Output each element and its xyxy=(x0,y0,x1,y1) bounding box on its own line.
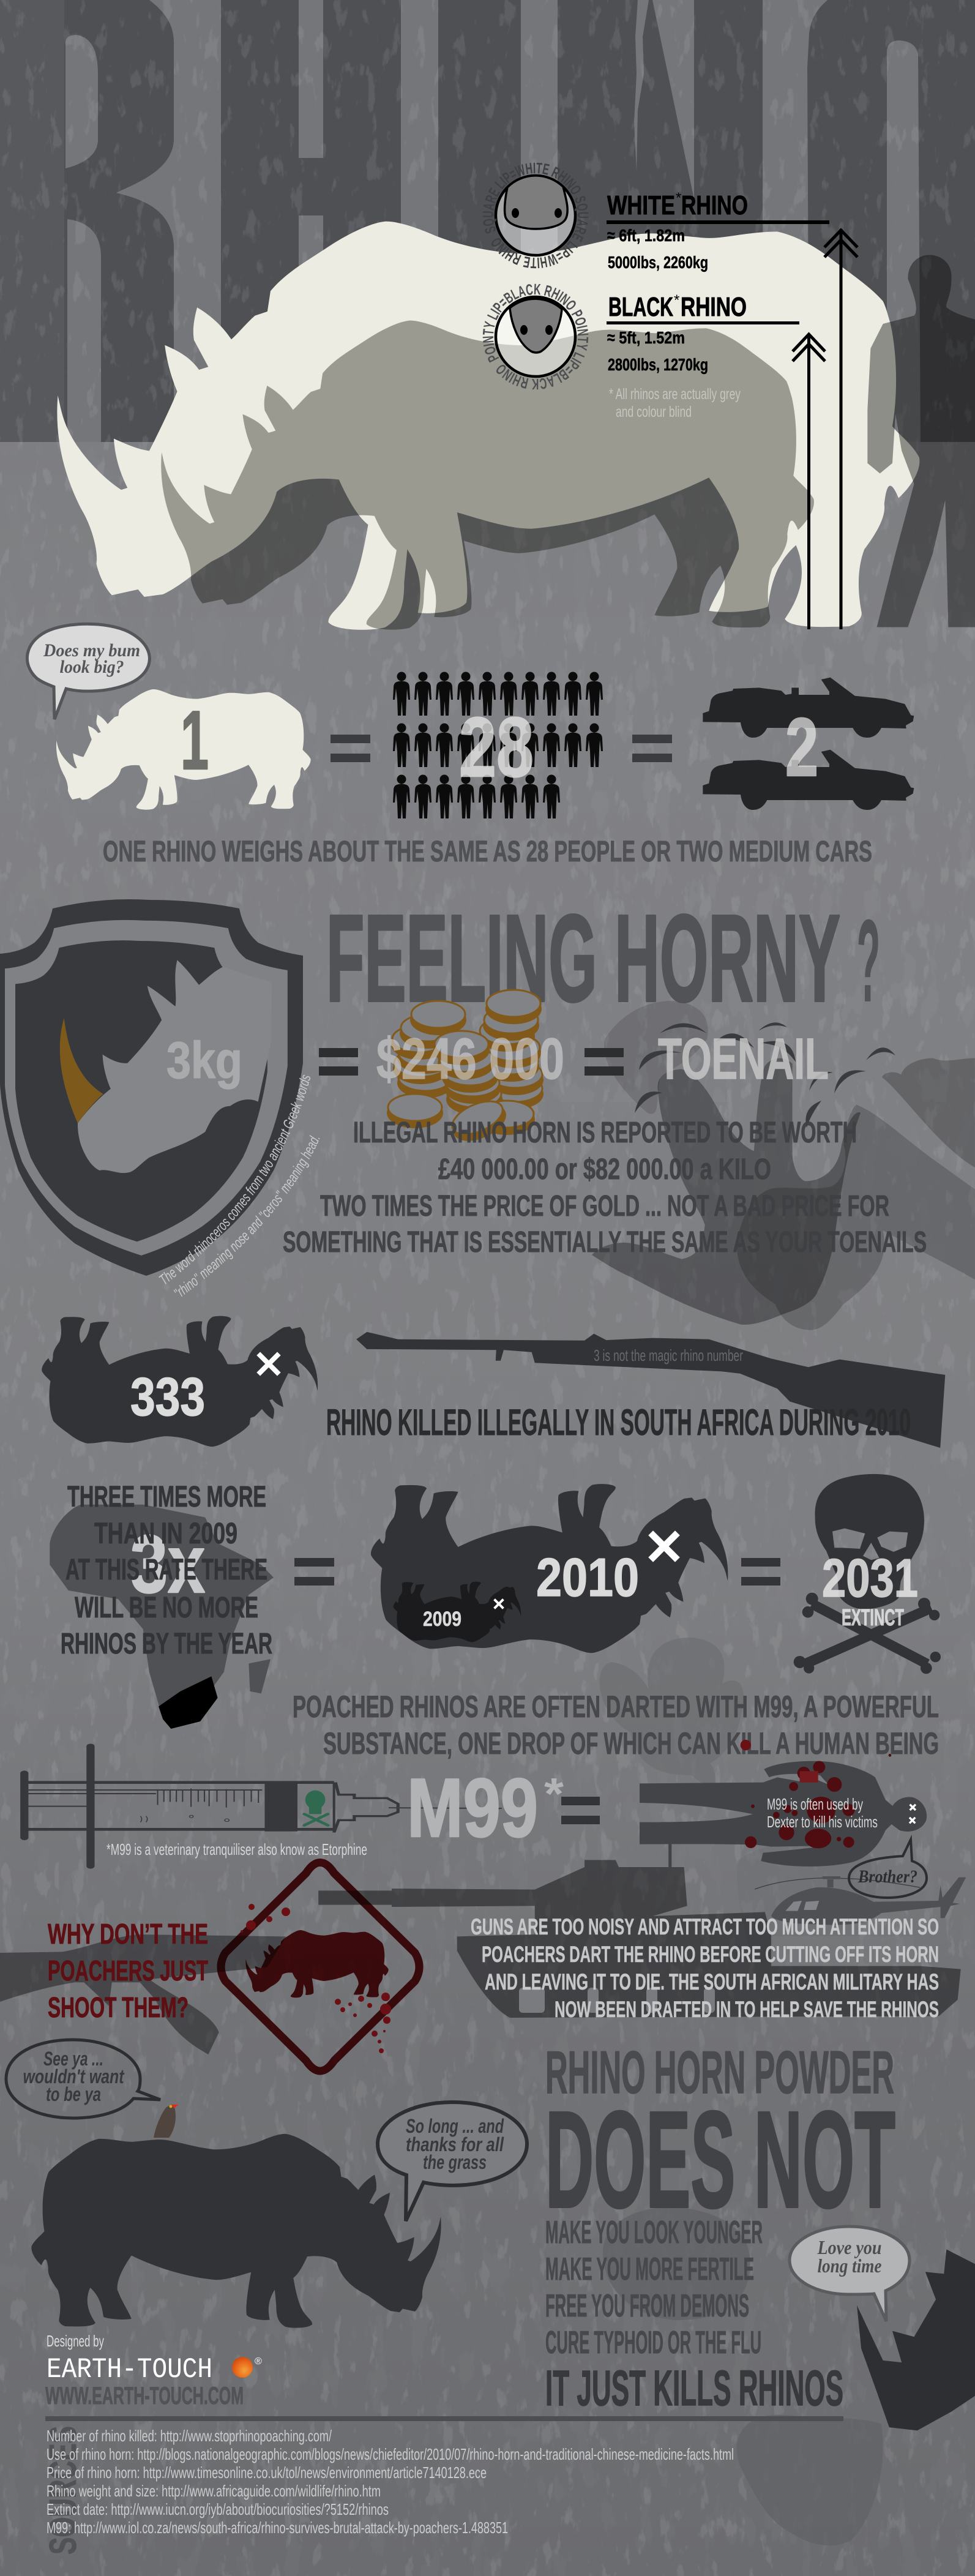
divider rule xyxy=(45,2416,843,2421)
arrow: white rhino height xyxy=(824,229,857,629)
dead rhino: 333 xyxy=(42,1316,318,1447)
black rhino stats xyxy=(607,292,799,374)
white rhino stats: 5000lbs, 2260kg xyxy=(608,253,708,272)
speech bubble: so long xyxy=(378,2102,527,2221)
number: 28: 28 xyxy=(459,700,534,795)
blood droplets xyxy=(241,1904,391,2053)
equals sign xyxy=(561,1797,600,1824)
white rhino stats: * xyxy=(676,190,681,206)
number: 3x: 3x xyxy=(130,1519,205,1610)
lip circle: white rhino: SQUARE LIP=WHITE RHINO SQUARE LIP=WHITE RHINO xyxy=(482,163,589,268)
question: why don't the poachers just shoot them xyxy=(48,1918,208,2023)
black rhino stats: * xyxy=(674,292,679,309)
warning diamond xyxy=(221,1862,419,2071)
skull and crossbones xyxy=(794,1474,941,1674)
South Africa highlight xyxy=(159,1676,218,1729)
equals sign xyxy=(632,735,672,762)
question: why don't the poachers just shoot them: WHY DON’T THE xyxy=(48,1918,208,1950)
body caption xyxy=(767,1795,878,1831)
poison skull label xyxy=(304,1791,328,1825)
black rhino stats: 2800lbs, 1270kg xyxy=(608,355,708,374)
gold coins xyxy=(387,990,544,1148)
dead rhino: 2010 with 2009 inset xyxy=(371,1484,728,1653)
sources list: Rhino weight and size: http://www.africaguide.com/wildlife/rhino.htm xyxy=(47,2482,381,2500)
arrow: black rhino height xyxy=(793,334,825,629)
footnote: rhino colour: and colour blind xyxy=(616,403,692,421)
human silhouette for scale xyxy=(867,255,975,627)
white rhino stats: RHINO xyxy=(681,190,748,220)
lip circle: black rhino: POINTY LIP=BLACK RHINO POINTY LIP=BLACK RHINO xyxy=(482,284,589,389)
sources list: M99: http://www.iol.co.za/news/south-africa/rhino-survives-brutal-attack-by-poachers-1.488351 xyxy=(47,2518,508,2537)
etymology note on curve: The word rhinoceros comes from two ancient Greek words xyxy=(159,1075,311,1284)
extinction projection text: RHINOS BY THE YEAR xyxy=(61,1628,272,1660)
speech bubble: love you: long time xyxy=(818,2255,881,2277)
number: 3kg: 3kg xyxy=(166,1032,242,1089)
footnote: rhino colour xyxy=(609,386,741,421)
x eyes xyxy=(910,1805,916,1823)
speech bubble: see ya xyxy=(6,2040,160,2118)
designer credit: ® xyxy=(255,2356,262,2367)
equals sign xyxy=(331,735,370,762)
rhino head in shield xyxy=(78,960,272,1173)
two cars xyxy=(703,678,914,810)
speech bubble: so long: thanks for all xyxy=(406,2133,504,2155)
speech bubble: see ya: wouldn't want xyxy=(23,2065,125,2087)
year: 2031 extinct: 2031 xyxy=(822,1548,918,1608)
equals sign xyxy=(741,1558,780,1586)
black rhino silhouette xyxy=(161,321,814,630)
black rhino stats: ≈ 5ft, 1.52m xyxy=(607,328,685,347)
designer credit: EARTH-TOUCH xyxy=(47,2354,212,2386)
label: M99: M99 xyxy=(407,1761,538,1854)
speech bubble: so long: So long ... and xyxy=(406,2115,504,2137)
white rhino stats xyxy=(607,190,829,272)
body caption: M99 is often used by xyxy=(767,1795,863,1813)
red rhino xyxy=(245,1930,389,1998)
speech bubble: does my bum: look big? xyxy=(60,657,124,677)
year: 2031 extinct xyxy=(822,1548,918,1631)
powder myths block: FREE YOU FROM DEMONS xyxy=(545,2288,749,2324)
extinction projection text xyxy=(61,1481,272,1660)
sources list: Number of rhino killed: http://www.stoprhinopoaching.com/ xyxy=(47,2427,332,2445)
year: 2031 extinct: EXTINCT xyxy=(842,1605,904,1631)
rifle: 3 is not the magic rhino number xyxy=(594,1346,743,1365)
ghost figure behind M99 xyxy=(600,1638,744,1786)
dead rhino: 2010 with 2009 inset: 2009 xyxy=(423,1608,461,1631)
assault rifle silhouette xyxy=(0,1934,286,2054)
powder myths block: MAKE YOU MORE FERTILE xyxy=(545,2252,754,2287)
speech bubble: love you xyxy=(790,2226,910,2321)
horn price text xyxy=(283,1117,927,1259)
tank silhouette xyxy=(318,1837,961,2018)
small rhino: 1: 1 xyxy=(181,694,209,787)
extinction projection text: AT THIS RATE THERE xyxy=(65,1554,267,1586)
white rhino stats: ≈ 6ft, 1.82m xyxy=(607,226,685,245)
blood splatter xyxy=(741,1740,891,1848)
sources list: Extinct date: http://www.iucn.org/iyb/about/biocuriosities/?5152/rhinos xyxy=(47,2500,389,2518)
ghost figures behind powder text xyxy=(603,2207,883,2545)
equals sign xyxy=(585,1048,624,1076)
syringe xyxy=(24,1747,499,1866)
speech bubble: so long: the grass xyxy=(423,2151,487,2173)
background: forest of giant RHINO letters xyxy=(0,0,975,442)
word: toenail: TOENAIL xyxy=(658,1027,829,1091)
text: ? xyxy=(857,896,880,1026)
white rhino stats: WHITE xyxy=(607,190,675,220)
designer credit: WWW.EARTH-TOUCH.COM xyxy=(45,2383,244,2409)
black rhino stats: RHINO xyxy=(681,292,747,322)
speech bubble: love you: Love you xyxy=(817,2236,881,2258)
speech bubble: see ya: See ya ... xyxy=(43,2048,103,2070)
syringe footnote: *M99 is a veterinary tranquiliser also know as Etorphine xyxy=(106,1840,367,1859)
toenail crescents xyxy=(635,1022,895,1128)
question: why don't the poachers just shoot them: SHOOT THEM? xyxy=(48,1991,189,2023)
M99 warning text xyxy=(293,1690,939,1761)
label: M99: * xyxy=(544,1770,564,1819)
powder myths block: MAKE YOU LOOK YOUNGER xyxy=(545,2215,763,2250)
small rhino: 1 xyxy=(56,689,311,810)
tank wheel gaps xyxy=(519,1936,914,2013)
dead rhino: 333: 333 xyxy=(130,1366,205,1427)
shield with rhino head xyxy=(0,899,303,1276)
sources list xyxy=(47,2427,734,2537)
speech bubble: does my bum xyxy=(27,624,149,719)
sources vertical label: SOURCES xyxy=(42,2426,84,2555)
speech bubble: does my bum: Does my bum xyxy=(43,640,140,661)
dead rhino: 2010 with 2009 inset: 2010 xyxy=(536,1547,639,1608)
ghost figure below body xyxy=(737,1841,877,1990)
right rhino head xyxy=(857,2250,975,2430)
horn price text: £40 000.00 or $82 000.00 a KILO xyxy=(438,1153,771,1186)
equals sign xyxy=(294,1558,334,1586)
value: $246 000: $246 000 xyxy=(376,1027,564,1091)
oxpecker bird xyxy=(154,2105,179,2138)
speech bubble: see ya: to be ya xyxy=(46,2083,101,2105)
small helicopter xyxy=(755,1876,966,1925)
footnote: rhino colour: * All rhinos are actually grey xyxy=(609,386,741,403)
bottom rhino xyxy=(31,2134,441,2328)
dead body with blood xyxy=(640,1740,927,1866)
hands and feet silhouettes xyxy=(592,1001,975,1330)
body caption: Dexter to kill his victims xyxy=(767,1813,878,1831)
black rhino stats: BLACK xyxy=(608,292,673,322)
answer text: guns are too noisy xyxy=(471,1914,939,2022)
powder myths block xyxy=(545,2039,895,2416)
horn in shield xyxy=(60,1018,103,1123)
sources list: Price of rhino horn: http://www.timesonline.co.uk/tol/news/environment/article7140128.ece xyxy=(47,2463,487,2482)
etymology note on curve: "rhino" meaning nose and "ceros" meaning head. xyxy=(174,1135,319,1297)
map of Africa xyxy=(50,1505,274,1729)
speech bubble: brother: Brother? xyxy=(857,1866,917,1887)
rifle xyxy=(356,1332,945,1448)
equals sign xyxy=(319,1048,358,1076)
28 people xyxy=(393,672,603,818)
white rhino silhouette xyxy=(57,222,919,630)
extinction projection text: WILL BE NO MORE xyxy=(75,1592,258,1624)
designer credit: Designed by xyxy=(47,2332,104,2350)
speech bubble: brother xyxy=(849,1840,927,1898)
question: why don't the poachers just shoot them: POACHERS JUST xyxy=(48,1955,208,1986)
extinction projection text: THREE TIMES MORE xyxy=(67,1481,266,1513)
designer credit xyxy=(45,2332,262,2409)
two cars: 2 xyxy=(785,701,818,793)
powder myths block: CURE TYPHOID OR THE FLU xyxy=(545,2325,761,2361)
extinction projection text: THAN IN 2009 xyxy=(94,1518,237,1550)
